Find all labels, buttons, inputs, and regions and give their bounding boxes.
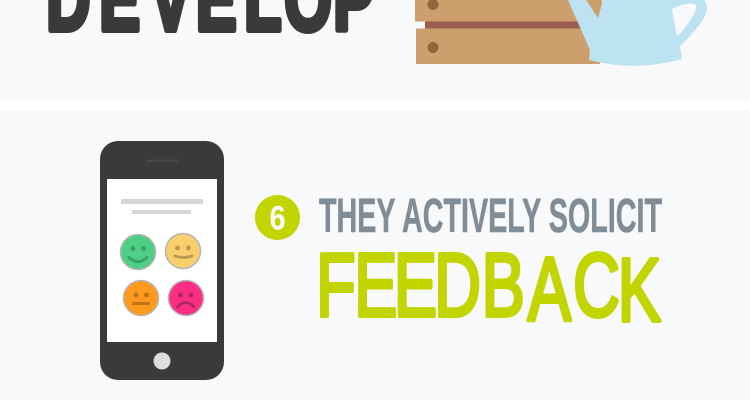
icon: neutral face: [124, 280, 158, 316]
number badge: 6: 6: [269, 198, 286, 237]
icon: content face: [166, 234, 200, 268]
icon: happy face: [120, 234, 156, 270]
panel: bottom section background: [0, 110, 750, 400]
icon: wooden crate: [415, 0, 602, 64]
icon: watering can: [568, 0, 707, 66]
icon: smartphone with feedback faces: [100, 141, 224, 380]
icon: sad face: [168, 280, 204, 316]
number badge: 6: [255, 195, 300, 240]
heading: FEEDBACK: FEEDBACK: [316, 235, 661, 341]
panel: top section background: [0, 0, 750, 100]
